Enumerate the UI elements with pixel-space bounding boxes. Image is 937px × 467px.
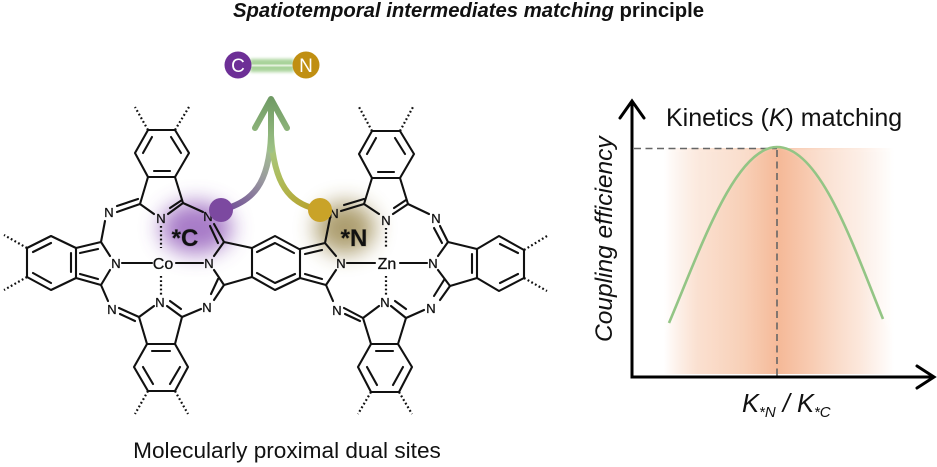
title: Spatiotemporal intermediates matching principle bbox=[233, 0, 704, 22]
x axis label: *C bbox=[814, 404, 831, 421]
atom labels in macrocycles: N bbox=[381, 213, 391, 228]
guide dashes bbox=[634, 148, 777, 377]
shaded optimum band bbox=[664, 148, 894, 374]
Co macrocycle bonds bbox=[27, 130, 252, 391]
axes bbox=[632, 101, 934, 377]
x axis label: / K bbox=[776, 390, 815, 418]
site dot: C bbox=[209, 198, 233, 222]
x arrowhead bbox=[917, 366, 934, 388]
atom labels in macrocycles: N bbox=[104, 205, 114, 220]
atom labels in macrocycles: N bbox=[111, 256, 121, 271]
label: *N: *N bbox=[341, 225, 367, 252]
product: C≡N molecule: C bbox=[231, 56, 245, 77]
x axis label: *N bbox=[759, 404, 776, 421]
product: C≡N molecule: N bbox=[299, 56, 313, 77]
atom labels in macrocycles: N bbox=[336, 256, 346, 271]
curve bbox=[669, 147, 883, 323]
atom labels in macrocycles: Zn bbox=[378, 256, 396, 273]
atom labels in macrocycles: N bbox=[380, 295, 390, 310]
atom labels in macrocycles: N bbox=[155, 295, 165, 310]
atom labels in macrocycles: N bbox=[431, 211, 441, 226]
central fused benzene bbox=[252, 236, 300, 290]
atom labels in macrocycles: N bbox=[329, 206, 339, 221]
glow: *N site bbox=[315, 202, 375, 254]
white halo above curve bbox=[664, 148, 894, 335]
caption: dual sites: Molecularly proximal dual sites bbox=[133, 438, 441, 463]
label: *C: *C bbox=[172, 225, 198, 252]
y arrowhead bbox=[620, 101, 644, 118]
glow: *C site bbox=[160, 202, 232, 254]
atom labels in macrocycles: N bbox=[107, 302, 117, 317]
atom labels in macrocycles: Co bbox=[153, 256, 173, 273]
site dot: N bbox=[308, 198, 332, 222]
atom labels in macrocycles: N bbox=[204, 256, 214, 271]
atom labels in macrocycles: N bbox=[156, 211, 166, 226]
molecule: dual-site phthalocyanine bbox=[4, 107, 547, 414]
chart: kinetics matching volcano curve bbox=[591, 101, 934, 421]
product: C≡N molecule bbox=[224, 52, 320, 78]
dotted coordination and edge bonds bbox=[4, 107, 547, 414]
Zn macrocycle bonds bbox=[300, 131, 524, 392]
atom labels in macrocycles: N bbox=[203, 209, 213, 224]
atom labels in macrocycles: N bbox=[202, 300, 212, 315]
x axis label: K bbox=[742, 390, 759, 418]
arrow: merging coupling paths bbox=[225, 99, 316, 209]
y axis label: Coupling efficiency bbox=[591, 135, 618, 342]
atom labels in macrocycles bbox=[104, 205, 441, 318]
atom labels in macrocycles: N bbox=[428, 256, 438, 271]
atom labels in macrocycles: N bbox=[426, 301, 436, 316]
atom labels in macrocycles: N bbox=[332, 303, 342, 318]
chart heading: Kinetics (K) matching bbox=[666, 104, 902, 132]
